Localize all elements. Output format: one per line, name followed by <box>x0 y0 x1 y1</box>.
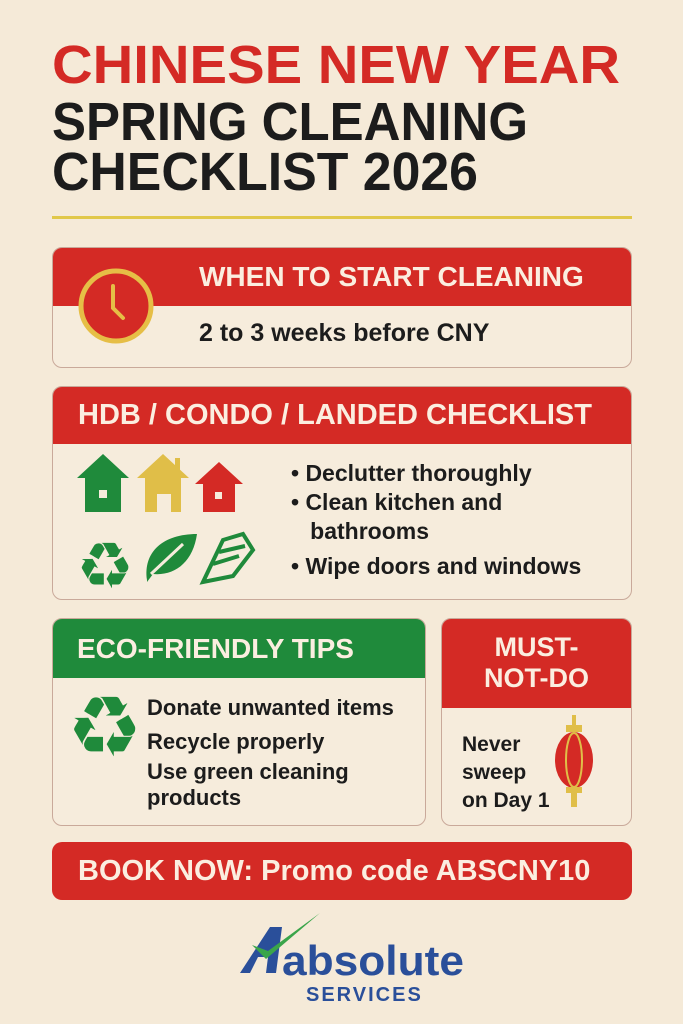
panel: checklist: HDB / CONDO / LANDED CHECKLIST <box>78 399 592 431</box>
panel: eco-friendly tips: Recycle properly <box>147 729 324 754</box>
panel: must-not-do: NOT-DO <box>484 663 589 693</box>
panel: must-not-do: MUST- <box>494 632 578 662</box>
title <box>52 35 620 200</box>
title: CHINESE NEW YEAR <box>52 35 620 95</box>
panel: must-not-do: on Day 1 <box>462 789 550 812</box>
bullet list: • Declutter thoroughly <box>291 460 532 486</box>
icon: recycle: ♻ <box>67 678 142 776</box>
panel: must-not-do: sweep <box>462 761 526 784</box>
callout: book now <box>52 842 632 900</box>
logo: SERVICES <box>306 984 423 1006</box>
panel: eco-friendly tips: products <box>147 785 241 810</box>
title: SPRING CLEANING <box>52 92 528 152</box>
panel: checklist <box>52 386 632 600</box>
panel: eco-friendly tips: Use green cleaning <box>147 759 349 784</box>
bullet list: bathrooms <box>310 518 429 544</box>
icons: houses and eco <box>76 454 256 592</box>
panel: must-not-do: Never <box>462 733 520 756</box>
bullet list <box>291 460 581 579</box>
panel: eco-friendly tips: ECO-FRIENDLY TIPS <box>77 633 354 664</box>
panel: eco-friendly tips: Donate unwanted items <box>147 695 394 720</box>
panel: when to start <box>52 247 632 368</box>
logo: absolute <box>282 937 464 984</box>
logo <box>240 913 464 1006</box>
panel: eco-friendly tips <box>52 618 426 826</box>
bullet list: • Wipe doors and windows <box>291 553 581 579</box>
panel: must-not-do <box>441 618 632 826</box>
icon: lantern <box>555 715 593 807</box>
bullet list: • Clean kitchen and <box>291 489 502 515</box>
callout: book now: BOOK NOW: Promo code ABSCNY10 <box>78 855 590 887</box>
panel: when to start: 2 to 3 weeks before CNY <box>199 319 489 347</box>
panel: when to start: WHEN TO START CLEANING <box>199 261 584 292</box>
icon: clock <box>78 268 154 344</box>
